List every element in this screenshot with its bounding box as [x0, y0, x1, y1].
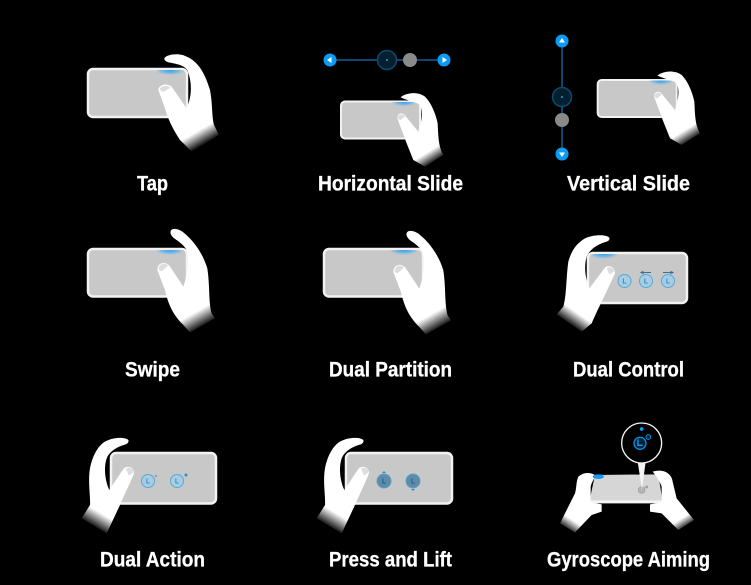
icon: hand [317, 438, 369, 533]
icon: hand [557, 235, 615, 332]
slider [552, 34, 572, 160]
phone [341, 102, 420, 138]
icon: hand [393, 231, 451, 334]
slider [324, 50, 450, 70]
phone [88, 249, 187, 296]
press and lift buttons [377, 471, 420, 491]
label: Tap [137, 172, 168, 196]
control buttons: L [644, 278, 649, 286]
icon: hand [397, 93, 443, 167]
panel: Dual Partition [324, 231, 452, 382]
icon: hand [82, 438, 134, 533]
panel: Gyroscope Aiming [547, 423, 710, 572]
press and lift buttons: L [411, 478, 416, 486]
phone [111, 453, 216, 504]
icon: hand right [650, 471, 694, 530]
label: Gyroscope Aiming [547, 548, 710, 572]
icon: hand [157, 229, 215, 332]
control buttons: L [666, 278, 671, 286]
label: Dual Control [573, 358, 684, 382]
label: Swipe [125, 358, 180, 382]
panel: Dual Control [557, 235, 687, 382]
label: Dual Partition [329, 358, 452, 382]
touch glow [593, 474, 604, 479]
label: Dual Action [100, 548, 205, 572]
icon: hand [158, 54, 219, 152]
phone [588, 253, 687, 303]
touch glow [156, 70, 184, 80]
panel: Tap [88, 54, 219, 196]
phone [346, 453, 452, 504]
label: Horizontal Slide [318, 172, 463, 196]
callout pointer [638, 462, 646, 490]
phone [590, 474, 662, 502]
panel: Dual Action [82, 438, 216, 572]
panel: Press and Lift [317, 438, 452, 572]
touch glow [392, 102, 416, 110]
touch glow [649, 80, 673, 89]
action buttons [142, 474, 188, 488]
icon: hand left [560, 473, 602, 532]
touch glow [590, 254, 618, 263]
control buttons: L [622, 278, 627, 286]
action buttons: L [146, 478, 151, 486]
phone [598, 80, 677, 117]
press and lift buttons: L [382, 478, 387, 486]
icon: hand [654, 71, 700, 145]
phone [88, 69, 187, 117]
touch glow [390, 250, 418, 259]
touch glow [156, 250, 184, 259]
panel: Horizontal Slide [318, 50, 463, 196]
phone [324, 249, 423, 296]
panel: Vertical Slide [552, 34, 700, 196]
phone reticle [638, 486, 648, 493]
control buttons [618, 272, 674, 288]
label: Press and Lift [329, 548, 452, 572]
callout circle [622, 423, 662, 463]
panel: Swipe [88, 229, 215, 382]
label: Vertical Slide [567, 172, 690, 196]
action buttons: L [175, 478, 180, 486]
